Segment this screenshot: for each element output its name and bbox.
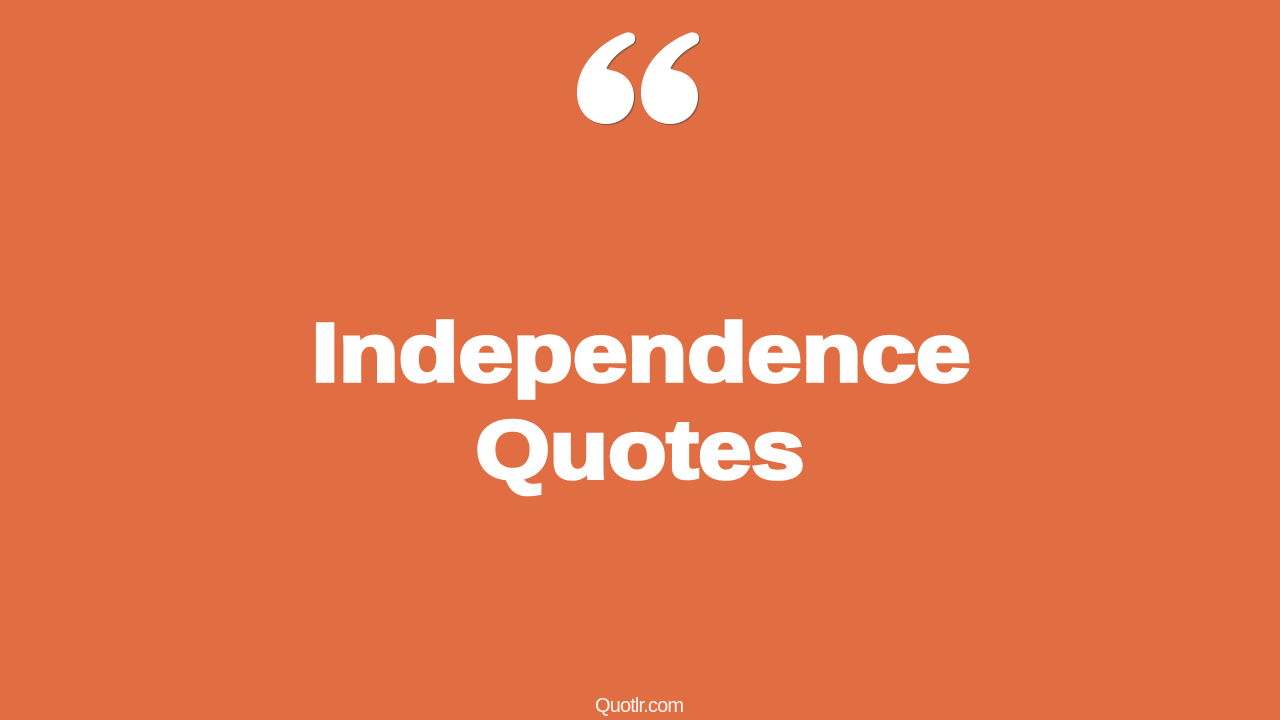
footer source label: Quotlr.com	[595, 695, 684, 717]
title line 2: Quotes	[476, 403, 804, 496]
title	[312, 306, 970, 496]
title line 1: Independence	[312, 306, 970, 399]
icon: quotation marks	[577, 32, 700, 125]
